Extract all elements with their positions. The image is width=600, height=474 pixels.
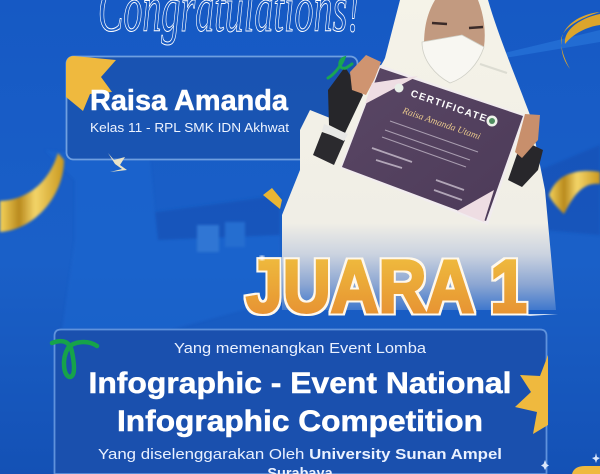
face mask xyxy=(422,35,484,83)
ribbon: right gold xyxy=(549,171,600,214)
mask strap xyxy=(480,64,507,73)
icon: green squiggle top xyxy=(328,58,352,78)
certificate ribbons xyxy=(365,76,494,222)
panel: student name xyxy=(66,56,358,160)
face xyxy=(424,0,485,47)
sparkle left xyxy=(260,256,264,260)
icon: sparkles xyxy=(541,453,600,470)
certificate body lines xyxy=(382,121,478,167)
icon: gold star xyxy=(66,56,116,111)
panel: event details xyxy=(54,330,546,474)
ribbon: top right gold xyxy=(561,12,600,69)
person xyxy=(282,0,556,310)
organiser: Yang diselenggarakan Oleh University Sunan Ampel xyxy=(98,447,502,463)
class: Kelas 11 - RPL SMK IDN Akhwat xyxy=(90,121,290,135)
event title line 1: Infographic - Event National xyxy=(88,367,512,400)
background building xyxy=(45,30,600,330)
certificate xyxy=(340,65,525,225)
sparkle right xyxy=(515,314,558,316)
left lower glove xyxy=(313,132,345,165)
icon: green squiggle bottom xyxy=(52,341,97,377)
ribbon: left gold xyxy=(0,153,64,232)
certificate heading: CERTIFICATE xyxy=(409,88,489,125)
left sleeve dark xyxy=(328,67,363,133)
ribbon: small white xyxy=(108,153,127,172)
white band xyxy=(322,124,348,141)
intro line: Yang memenangkan Event Lomba xyxy=(174,341,427,357)
right glove xyxy=(508,140,543,187)
ribbon: bottom right corner xyxy=(572,466,600,474)
ribbon: small gold xyxy=(263,188,282,209)
certificate signatures xyxy=(372,148,464,200)
hijab and robe xyxy=(282,0,556,310)
right hand xyxy=(515,114,540,158)
name: Raisa Amanda xyxy=(90,85,289,117)
heading: JUARA 1: JUARA 1 xyxy=(246,245,527,328)
left hand xyxy=(350,55,381,95)
certificate recipient: Raisa Amanda Utami xyxy=(400,106,482,143)
icon: gold star right xyxy=(515,355,548,434)
certificate logos xyxy=(394,84,404,92)
event title line 2: Infographic Competition xyxy=(117,405,483,438)
eyes xyxy=(432,23,483,28)
